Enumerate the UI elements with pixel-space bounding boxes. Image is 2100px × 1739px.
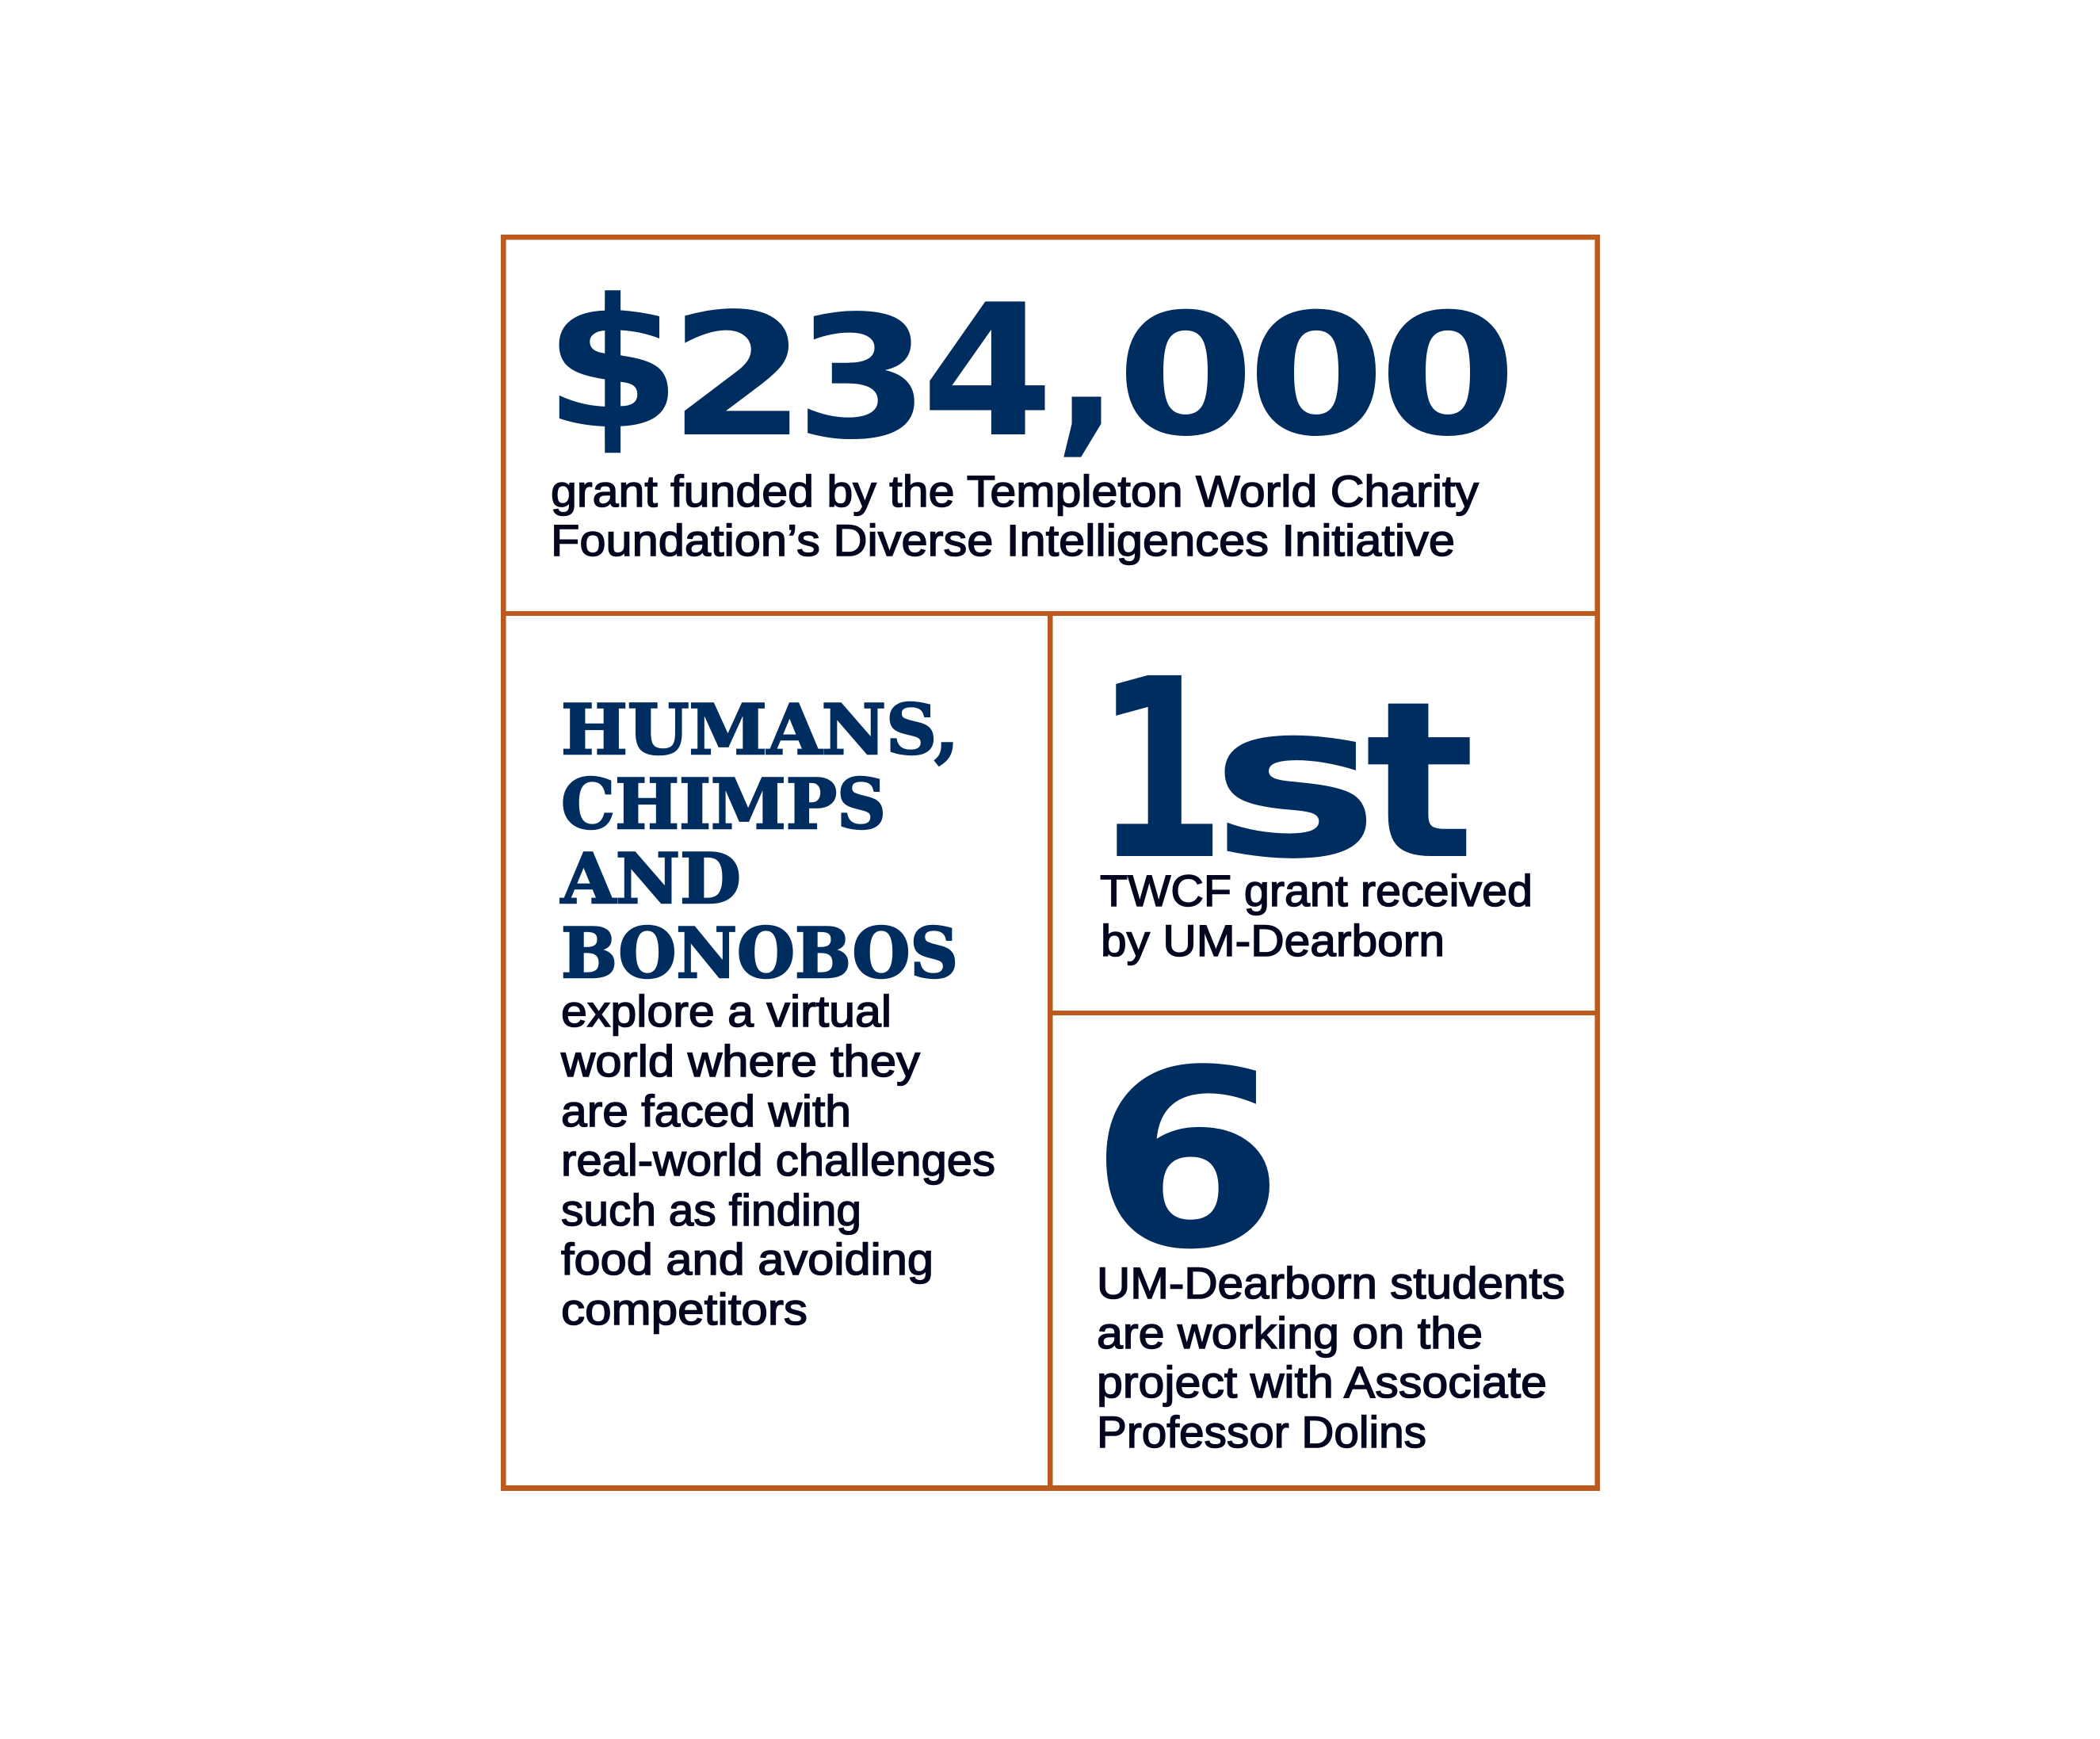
big number: 6: 6 [1089, 1018, 1285, 1303]
heading: humans, chimps and bonobos: HUMANS, [561, 689, 959, 770]
text: TWCF grant received: by UM-Dearborn [1101, 915, 1445, 965]
text: virtual world description: such as finding [561, 1185, 861, 1235]
big number: 1st [1095, 626, 1475, 915]
text: grant description [551, 466, 1479, 565]
big number: $234,000: 0 [1247, 277, 1385, 473]
text: virtual world description: explore a virtual [561, 986, 892, 1036]
big number: $234,000: 0 [1117, 277, 1254, 473]
big number: $234,000: 3 [795, 280, 930, 477]
text: virtual world description: food and avoiding [561, 1234, 934, 1284]
text: virtual world description: competitors [561, 1284, 808, 1334]
frame: orange grid lines [501, 235, 1600, 1491]
text: virtual world description: are faced with [561, 1086, 851, 1136]
text: students description: Professor Dolins [1097, 1407, 1426, 1457]
text: TWCF grant received [1100, 866, 1533, 965]
text: students description: are working on the [1097, 1308, 1483, 1358]
text: students description: project with Associate [1097, 1357, 1547, 1407]
big number: $234,000: 0 [1379, 277, 1517, 473]
heading: humans, chimps and bonobos: CHIMPS [561, 763, 886, 845]
text: TWCF grant received: TWCF grant received [1100, 866, 1533, 915]
text: students description [1097, 1258, 1565, 1457]
big number: 1st: t [1365, 655, 1475, 908]
big number: 1st: s [1210, 658, 1380, 906]
text: virtual world description: real-world challenges [561, 1135, 995, 1185]
big number: $234,000 [544, 261, 1517, 478]
big number: $234,000: $ [544, 261, 682, 469]
panel: six students [1089, 1018, 1565, 1457]
panel: first TWCF grant [1095, 626, 1533, 965]
big number: $234,000: 2 [669, 277, 807, 475]
big number: $234,000: 4 [922, 266, 1053, 478]
heading: humans, chimps and bonobos [560, 689, 959, 994]
text: virtual world description [560, 986, 995, 1334]
text: grant description: Foundation’s Diverse Intelligences Initiative [551, 515, 1455, 565]
panel: humans, chimps and bonobos [560, 689, 995, 1334]
text: virtual world description: world where they [560, 1036, 920, 1086]
text: students description: UM-Dearborn students [1097, 1258, 1565, 1308]
panel: grant amount [544, 261, 1517, 565]
heading: humans, chimps and bonobos: BONOBOS [561, 912, 958, 994]
big number: 1st: 1 [1095, 626, 1225, 915]
big number: $234,000: , [1055, 262, 1118, 474]
text: grant description: grant funded by the Templeton World Charity [551, 466, 1479, 516]
heading: humans, chimps and bonobos: AND [560, 838, 741, 919]
